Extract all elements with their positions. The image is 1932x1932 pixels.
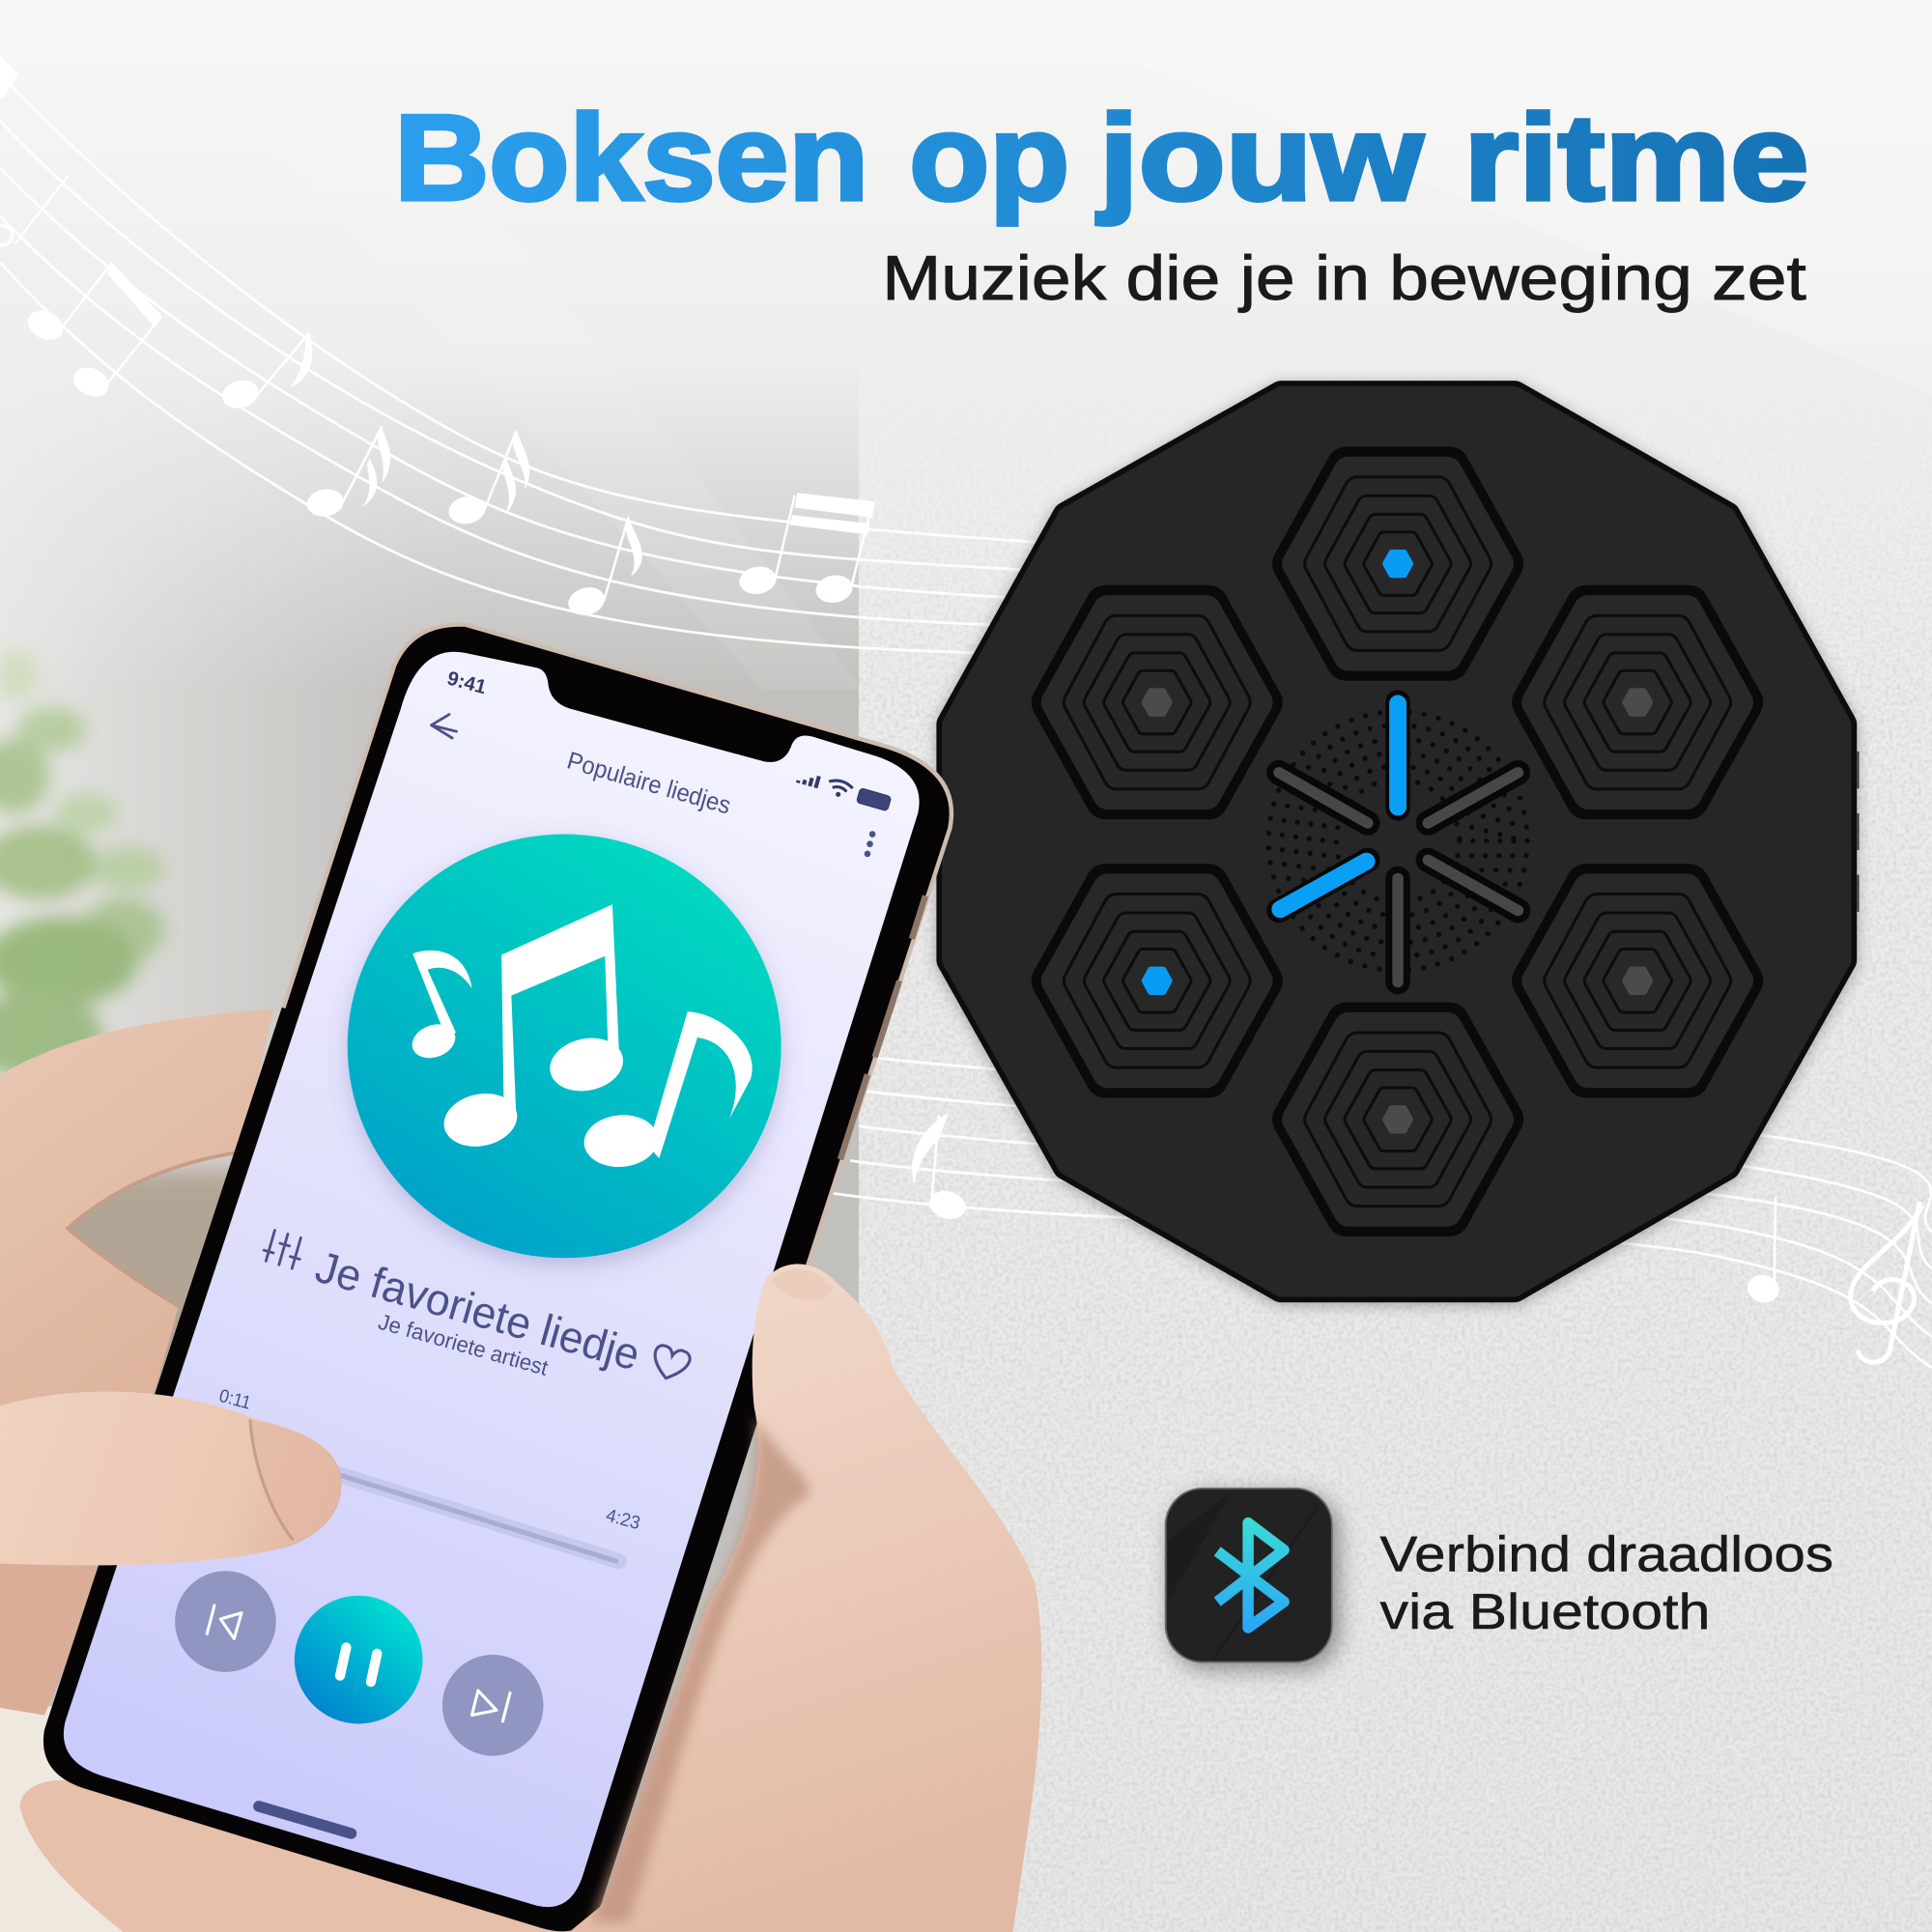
device: upper left target pad — [1051, 605, 1263, 800]
right hand: shadow along the phone — [591, 1417, 810, 1922]
phone: previous button — [175, 1571, 276, 1672]
notes: upper staff notes — [0, 55, 875, 619]
device: six indicator bars — [1279, 702, 1518, 982]
title: Boksen — [394, 90, 868, 226]
phone: side buttons — [840, 895, 925, 1159]
notes: lower staff notes and treble clef — [912, 1113, 1922, 1362]
background: diagonal light beam top right — [985, 0, 1932, 394]
device: side buttons — [1857, 752, 1859, 912]
left hand: fingers behind phone — [0, 1009, 273, 1716]
phone: total time: 4:23 — [604, 1506, 642, 1534]
phone: progress bar — [296, 1462, 618, 1561]
right hand: palm and thumb — [569, 1264, 1041, 1932]
device: wall-mounted boxing machine — [952, 395, 1858, 1288]
finger gap shadow — [68, 1152, 241, 1306]
device: bottom target pad — [1292, 1022, 1504, 1217]
subtitle: Muziek die je in beweging zet — [882, 242, 1806, 313]
phone: elapsed time: 0:11 — [216, 1386, 253, 1414]
device: twelve-sided body — [952, 395, 1842, 1288]
phone: pause button — [295, 1596, 423, 1723]
icon: more menu dots — [865, 831, 875, 857]
background: diagonal light beam top left — [185, 49, 863, 690]
icon: white music notes — [408, 904, 753, 1170]
phone: screen title: Populaire liedjes — [564, 747, 733, 820]
bluetooth callout — [1166, 1489, 1833, 1662]
phone: status bar time: 9:41 — [444, 668, 489, 698]
phone: home indicator — [259, 1806, 352, 1833]
bluetooth text second line: via Bluetooth — [1380, 1584, 1710, 1640]
hand: fingers under the phone — [19, 1780, 591, 1932]
icon: heart — [649, 1344, 692, 1383]
phone: body and bezel — [43, 625, 952, 1931]
thumb nail fold — [250, 1419, 294, 1540]
icon: equalizer sliders — [261, 1229, 305, 1270]
icon: status signal, wifi, battery — [797, 770, 892, 811]
staves: upper music staff — [0, 74, 1035, 654]
phone — [43, 625, 952, 1931]
phone: artist name: Je favoriete artiest — [376, 1309, 552, 1380]
background: left room panel — [0, 0, 859, 1932]
title: op — [909, 90, 1069, 226]
plant: blurred green foliage — [0, 650, 165, 1079]
device: lower right target pad — [1531, 884, 1744, 1078]
phone: screen — [64, 652, 920, 1907]
icon: back arrow — [430, 711, 460, 739]
phone: next button — [442, 1655, 543, 1756]
thumb nail — [250, 1419, 341, 1540]
left hand: thumb over the screen — [0, 1391, 341, 1566]
background: wall texture — [859, 246, 1932, 1932]
right hand: thumbnail — [771, 1269, 833, 1301]
title — [394, 90, 1808, 226]
icon: bluetooth rune — [1217, 1523, 1284, 1628]
device: upper right target pad — [1531, 605, 1744, 800]
phone: metal rim — [283, 625, 952, 1324]
background: top fade to white — [0, 0, 1932, 690]
background: right textured wall — [859, 0, 1932, 1932]
staves: lower music staff — [828, 1056, 1932, 1368]
background: blurred taupe floor behind the phone — [49, 1171, 296, 1417]
device: top target pad (lit) — [1292, 467, 1504, 661]
title: jouw — [1096, 90, 1424, 226]
title: ritme — [1463, 90, 1808, 226]
icon: bluetooth app tile — [1166, 1489, 1332, 1662]
device: lower left target pad (lit) — [1051, 884, 1263, 1078]
background: blurred light area of the room — [0, 308, 443, 1233]
background: pale textile bottom left — [0, 1707, 185, 1932]
bluetooth text first line: Verbind draadloos — [1380, 1526, 1833, 1582]
device: speaker perforations — [1268, 712, 1527, 970]
album art: music circle — [348, 835, 781, 1258]
phone: song title: Je favoriete liedje — [310, 1241, 645, 1379]
